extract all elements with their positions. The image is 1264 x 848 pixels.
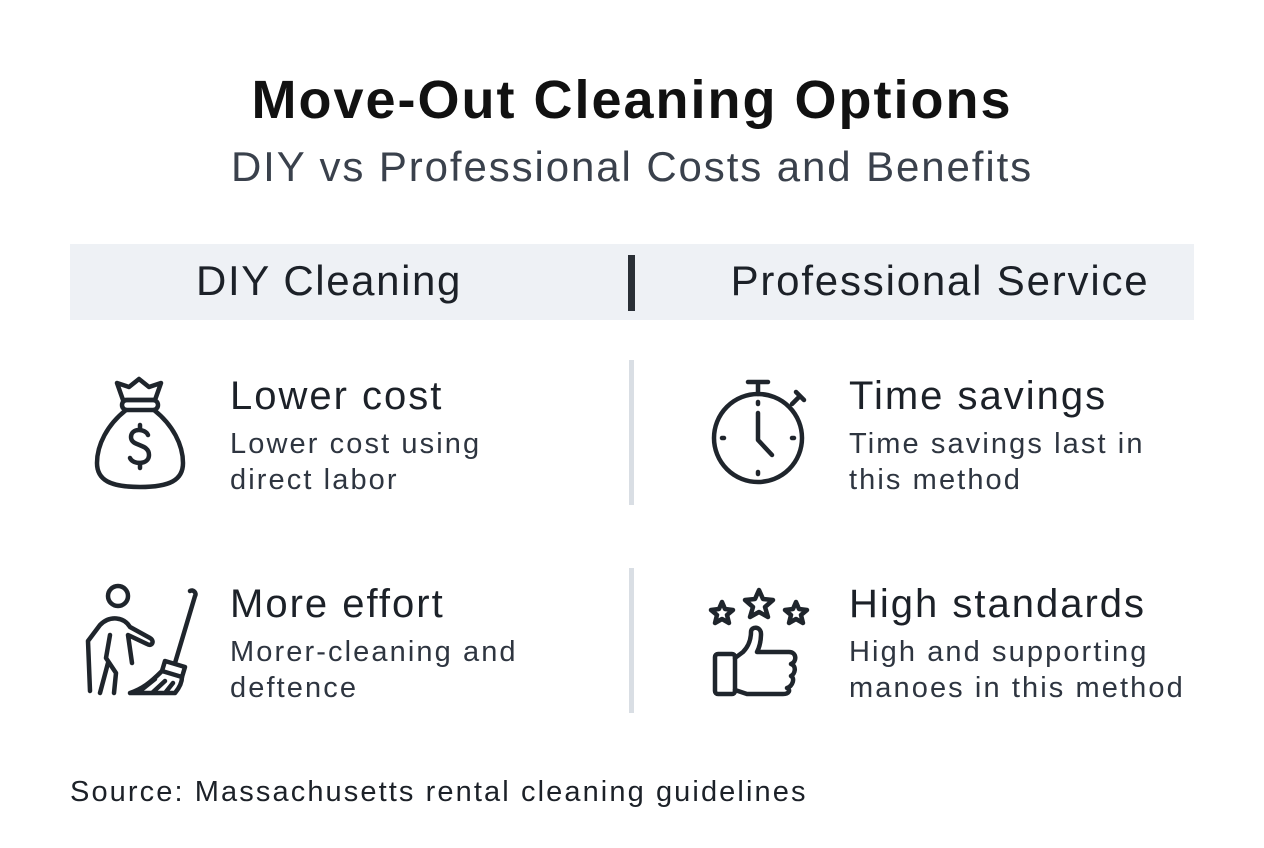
item: Lower cost: Lower cost using — [230, 428, 481, 460]
text: Time savings — [849, 374, 1107, 418]
text: More effort — [230, 582, 445, 626]
item: High standards: High and supporting — [849, 636, 1148, 668]
item: More effort: Morer-cleaning and — [230, 636, 518, 668]
header band — [70, 244, 1194, 320]
icon: person sweeping — [86, 584, 198, 696]
title: Move-Out Cleaning Options — [252, 70, 1012, 130]
icon: stars and thumbs up — [708, 588, 810, 696]
heading: DIY Cleaning: DIY Cleaning — [196, 257, 462, 304]
item: Time savings — [712, 374, 1145, 496]
icon: money bag — [94, 376, 186, 490]
item: More effort: deftence — [230, 672, 358, 704]
text: Lower cost — [230, 374, 443, 418]
item: Lower cost — [94, 374, 481, 496]
item: Time savings: Time savings last in — [849, 428, 1145, 460]
item: More effort — [86, 582, 518, 704]
item: High standards — [708, 582, 1185, 704]
heading: Professional Service: Professional Service — [731, 257, 1149, 304]
header divider — [628, 255, 635, 311]
source: Source: Massachusetts rental cleaning guidelines — [70, 776, 808, 808]
item: Lower cost: direct labor — [230, 464, 399, 496]
item: Time savings: this method — [849, 464, 1022, 496]
text: High standards — [849, 582, 1146, 626]
icon: stopwatch — [712, 380, 806, 484]
item: High standards: manoes in this method — [849, 672, 1185, 704]
subtitle: DIY vs Professional Costs and Benefits — [231, 143, 1033, 190]
